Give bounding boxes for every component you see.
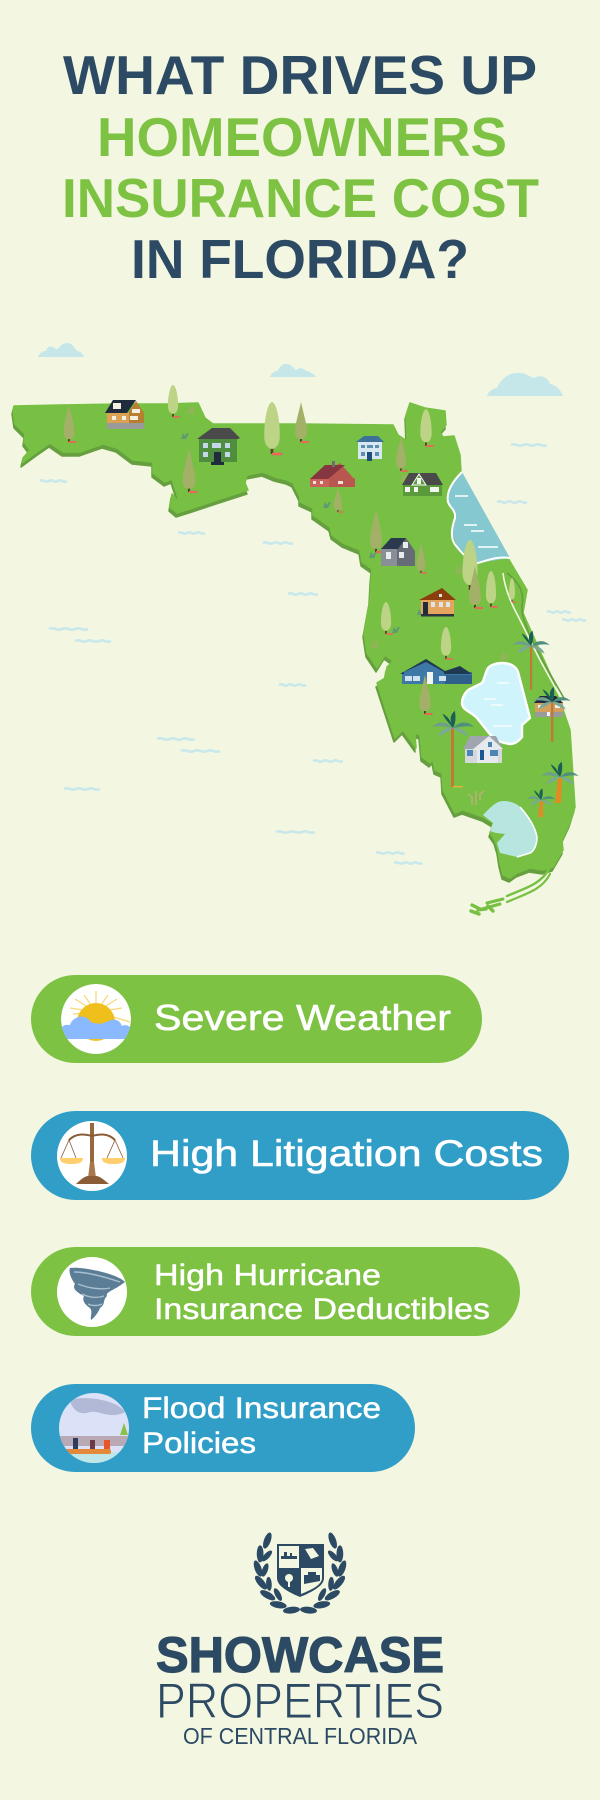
map: Florida bbox=[12, 385, 579, 914]
palm: short small bbox=[527, 788, 555, 817]
clouds bbox=[38, 343, 563, 396]
factor pill: litigation bbox=[31, 1111, 569, 1200]
lake ripples bbox=[484, 683, 512, 726]
trees bbox=[63, 385, 516, 660]
small plants bbox=[181, 405, 508, 660]
logo wordmark: OF CENTRAL FLORIDA bbox=[183, 1723, 417, 1749]
factor pill: severe weather bbox=[31, 975, 482, 1063]
water waves bbox=[40, 444, 586, 864]
palm: west bbox=[432, 711, 474, 787]
laurel wreath bbox=[252, 1531, 348, 1614]
house: white cottage bbox=[463, 736, 503, 763]
label: Flood Insurance bbox=[142, 1392, 381, 1425]
logo wordmark: PROPERTIES bbox=[156, 1673, 444, 1729]
factor pill: hurricane deductibles bbox=[31, 1247, 520, 1336]
Florida Bay bbox=[483, 801, 537, 857]
title: INSURANCE COST bbox=[62, 167, 539, 229]
label bbox=[154, 1259, 490, 1326]
title: WHAT DRIVES UP bbox=[63, 44, 537, 106]
lagoon ripples bbox=[455, 496, 498, 547]
logo crest bbox=[252, 1531, 348, 1614]
lake Okeechobee bbox=[462, 663, 530, 744]
label: Insurance Deductibles bbox=[154, 1293, 490, 1326]
palm: east coast top bbox=[512, 631, 550, 690]
icon: sun and cloud bbox=[61, 984, 131, 1054]
title: IN FLORIDA? bbox=[131, 228, 469, 290]
Florida Keys bbox=[471, 869, 550, 914]
barrier river shadow bbox=[507, 573, 565, 700]
icon: tornado bbox=[57, 1257, 127, 1327]
logo: Showcase Properties bbox=[156, 1531, 444, 1749]
label: High Hurricane bbox=[154, 1259, 381, 1292]
label: High Litigation Costs bbox=[150, 1133, 543, 1174]
palm: right house bbox=[533, 687, 571, 742]
label: Policies bbox=[142, 1427, 256, 1460]
house: blue ranch bbox=[400, 659, 472, 684]
house: red barn bbox=[310, 461, 355, 487]
house: green gable bbox=[402, 473, 443, 496]
house: orange two-storey bbox=[105, 400, 144, 429]
icon: flood rescue boat bbox=[59, 1393, 129, 1463]
title: HOMEOWNERS bbox=[97, 106, 507, 168]
house: orange with brown roof bbox=[419, 588, 456, 616]
bay shore bbox=[517, 807, 537, 857]
logo wordmark bbox=[156, 1627, 444, 1749]
map land bbox=[13, 403, 575, 878]
lagoon shore bbox=[448, 472, 510, 563]
factor pill: flood insurance bbox=[31, 1384, 415, 1472]
shield bbox=[277, 1544, 324, 1597]
title bbox=[62, 44, 539, 290]
label: Severe Weather bbox=[154, 997, 451, 1038]
house: grey bbox=[381, 538, 415, 566]
icon: scales of justice bbox=[57, 1121, 127, 1191]
lagoon bbox=[448, 472, 510, 563]
label bbox=[142, 1392, 381, 1460]
house: green with grey roof bbox=[197, 428, 240, 465]
house: light blue bbox=[356, 436, 384, 461]
barrier river bbox=[503, 573, 562, 700]
cactus bbox=[468, 791, 484, 805]
palm: short large bbox=[541, 762, 579, 803]
logo wordmark: SHOWCASE bbox=[156, 1627, 444, 1683]
house: tan right coast bbox=[534, 696, 563, 717]
map land shadow bbox=[12, 407, 574, 882]
tree in front of ranch bbox=[419, 675, 433, 715]
